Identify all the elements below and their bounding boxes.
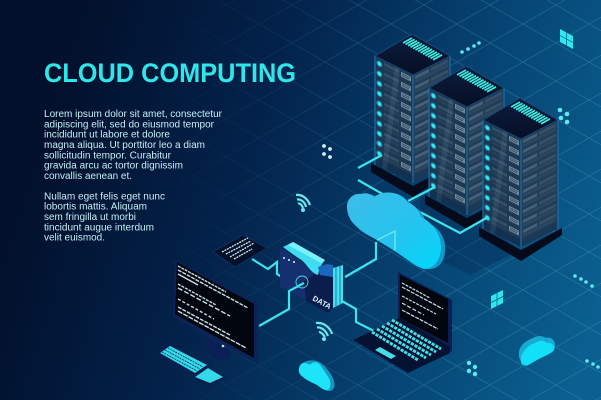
text block: second paragraph [44,191,165,244]
router: DATA box [280,242,343,313]
icon: dots right [573,274,594,288]
connection wires: servers to cloud [358,155,488,233]
text block: second paragraph: velit euismod. [44,233,105,244]
icon: wifi upper [296,195,310,211]
desktop monitor [173,260,258,364]
text block: first paragraph: gravida arcu ac tortor dignissim [44,161,183,172]
icon: four dots top [460,41,481,54]
server rack 3 [479,98,562,261]
text block: first paragraph: sollicitudin tempor. Curabitur [44,150,172,161]
icon: dots cluster bottom [467,361,477,376]
text block: second paragraph: tincidunt augue interdum [44,222,154,233]
text block: first paragraph: adipiscing elit, sed do eiusmod tempor [44,119,215,130]
small cloud bottom right [519,336,555,366]
tablet [213,235,267,267]
isometric floor grid [204,0,601,400]
icon: wifi lower [316,323,332,340]
text block: first paragraph: Lorem ipsum dolor sit amet, consectetur [44,109,223,120]
small cloud bottom centre [299,360,334,391]
laptop [353,272,452,373]
wire: monitor to router [259,283,304,326]
text block: first paragraph: magna aliqua. Ut porttitor leo a diam [44,140,205,151]
icon: dots cluster right of servers [558,108,569,124]
icon: dots bottom right [585,359,600,369]
text block: second paragraph: sem fringilla ut morbi [44,212,136,223]
wire: router to cloud [345,242,376,277]
server floor shadow [420,190,520,275]
icon: window tile lower [491,290,503,309]
title: CLOUD COMPUTING [44,58,296,88]
wire: tablet to router [252,259,282,277]
text block: second paragraph: Nullam eget felis eget nunc [44,191,165,202]
router: DATA box: DATA [311,294,333,311]
text block: first paragraph [44,109,223,182]
big cloud [347,193,445,269]
icon: window tile top right [560,29,573,49]
icon: dots cluster left [322,144,332,159]
text block: first paragraph: incididunt ut labore et dolore [44,130,170,141]
server rack 2 [425,66,508,229]
keyboard and numpad [156,344,226,386]
cloud uplink frame [377,231,395,250]
text block: first paragraph: convallis aenean et. [44,171,132,182]
text block: second paragraph: lobortis mattis. Aliquam [44,202,147,213]
wire: router to laptop [340,300,374,331]
server rack 1 [371,34,454,197]
